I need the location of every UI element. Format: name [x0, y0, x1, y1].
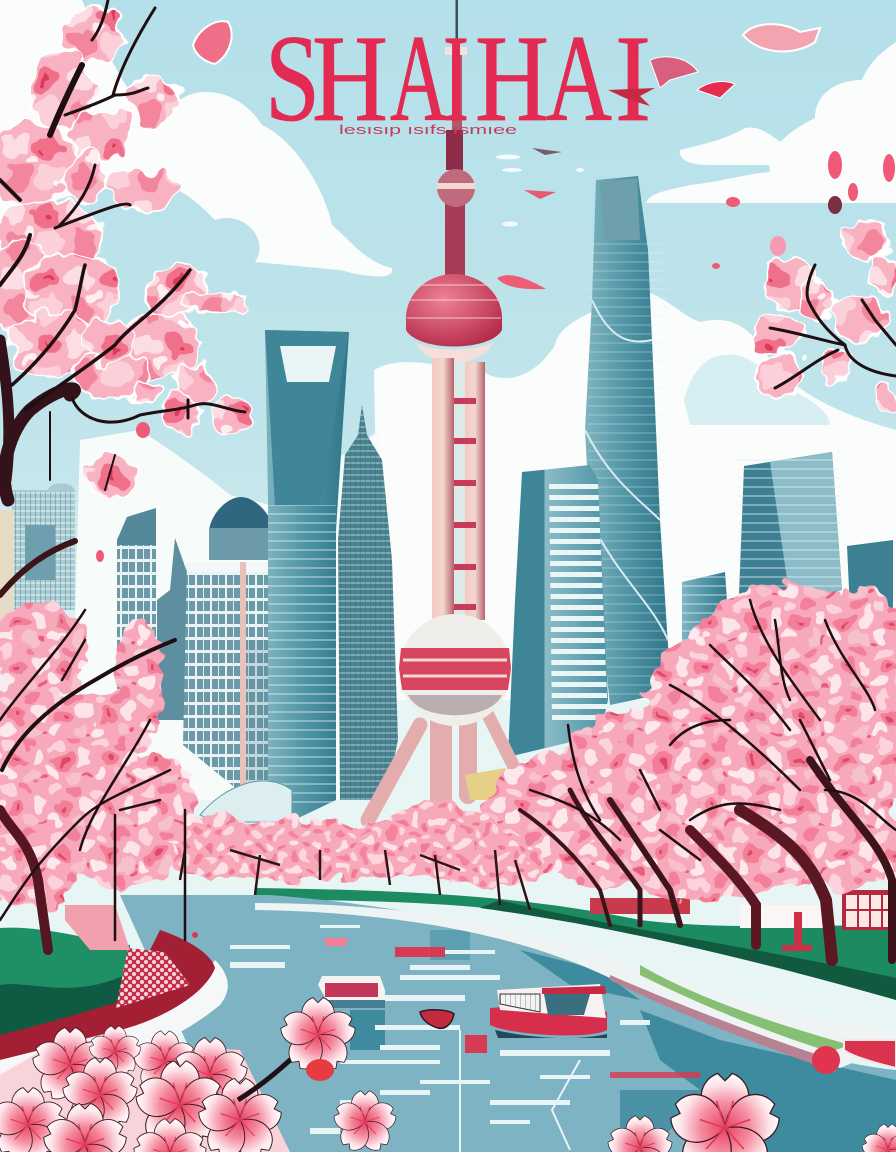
boat right: [490, 984, 607, 1038]
cloud: upper left, joined to the corner: [0, 0, 392, 276]
blossom clumps upper right: [751, 220, 896, 414]
Oriental Pearl Tower: [368, 0, 518, 820]
buildings right group: [682, 452, 893, 682]
reflected mast line: [460, 1030, 580, 1152]
blossom top centre left: [193, 21, 232, 64]
dark water reflections: [350, 930, 896, 1152]
red fallen petal: [306, 1059, 334, 1081]
building: right large tower: [738, 452, 842, 620]
letter H: H: [312, 10, 388, 147]
brick building: [842, 890, 896, 930]
cloud: thin band upper right: [680, 127, 815, 165]
building: curved glass tower: [508, 465, 608, 757]
curved embankment: [255, 903, 896, 1074]
branch to the floating blossom: [238, 1040, 312, 1100]
letter I: I: [443, 10, 469, 147]
tree row along the waterfront: [140, 802, 545, 910]
falling petals: [96, 21, 895, 562]
building: far left tower: [0, 483, 75, 630]
letter A: A: [390, 10, 448, 147]
building: small spire: [157, 538, 188, 720]
subtitle: lesısıp ısıfs ısmıee: [339, 122, 517, 137]
tower legs: [368, 715, 518, 820]
letter A second: A: [546, 10, 612, 147]
tower spire: [445, 0, 467, 170]
title: [265, 10, 651, 147]
cloud: upper right: [646, 42, 896, 203]
trunks and branches right: [520, 600, 896, 960]
red floating reflections: [192, 932, 700, 1078]
building: Shanghai Tower: [585, 176, 671, 705]
letter S: S: [265, 10, 320, 147]
upper pearl sphere: [406, 274, 502, 363]
small upper sphere: [437, 169, 475, 285]
letter H second: H: [475, 10, 549, 147]
foreground blossoms bottom left: [0, 998, 359, 1152]
large petal top right: [743, 24, 820, 51]
upper right tree: [751, 220, 896, 414]
cloud: central right, fading to the horizon: [374, 290, 896, 700]
central shaft columns: [432, 358, 485, 620]
dark shrub: [0, 975, 125, 1040]
white curved wall: [0, 960, 228, 1090]
building: slim glass tower: [117, 508, 156, 712]
blossom mass right: [475, 582, 896, 900]
birdlike petals by the title: [650, 57, 698, 88]
red barge at right edge: [844, 1040, 896, 1068]
clouds: [0, 0, 896, 800]
trees right lower mass: [475, 582, 896, 960]
branches upper left: [0, 0, 245, 500]
branches left lower: [0, 541, 185, 950]
pink blossom block: [65, 905, 130, 950]
patterned planter bed: [116, 948, 190, 1008]
haze behind the left skyline: [70, 430, 380, 800]
base plinth: [465, 768, 510, 800]
blossom clumps upper left: [0, 9, 252, 497]
red planter: [0, 930, 215, 1060]
foreground blossoms bottom right: [605, 1073, 896, 1152]
upper left tree: [0, 0, 252, 500]
water highlights: [230, 925, 650, 1134]
foreground blossom bottom centre: [331, 1091, 399, 1152]
building: far right block: [847, 540, 893, 610]
letter I second: I: [615, 10, 651, 147]
building: domed tower: [183, 497, 306, 800]
small red rowboat: [420, 1010, 454, 1028]
building: right low tower: [682, 572, 731, 682]
lawn: [0, 928, 130, 1040]
building: low curved pavilion: [200, 781, 292, 822]
branches upper right: [770, 265, 896, 388]
building: Shanghai World Financial Center: [265, 330, 349, 822]
blossom backing: [0, 1040, 290, 1152]
pale inner cloud right: [684, 354, 830, 425]
grass bank right with park structures: [255, 888, 896, 1000]
left green island and planter: [0, 905, 228, 1090]
red kiosk: [782, 912, 812, 951]
white pavilion wall: [740, 905, 825, 928]
boat left: [318, 976, 385, 1008]
red band behind trunks: [590, 898, 690, 914]
left lower tree: [0, 541, 198, 950]
buildings left group: [0, 483, 306, 800]
building: Jin Mao Tower: [338, 405, 398, 800]
river: [120, 895, 896, 1152]
lower pearl sphere: [399, 614, 511, 726]
